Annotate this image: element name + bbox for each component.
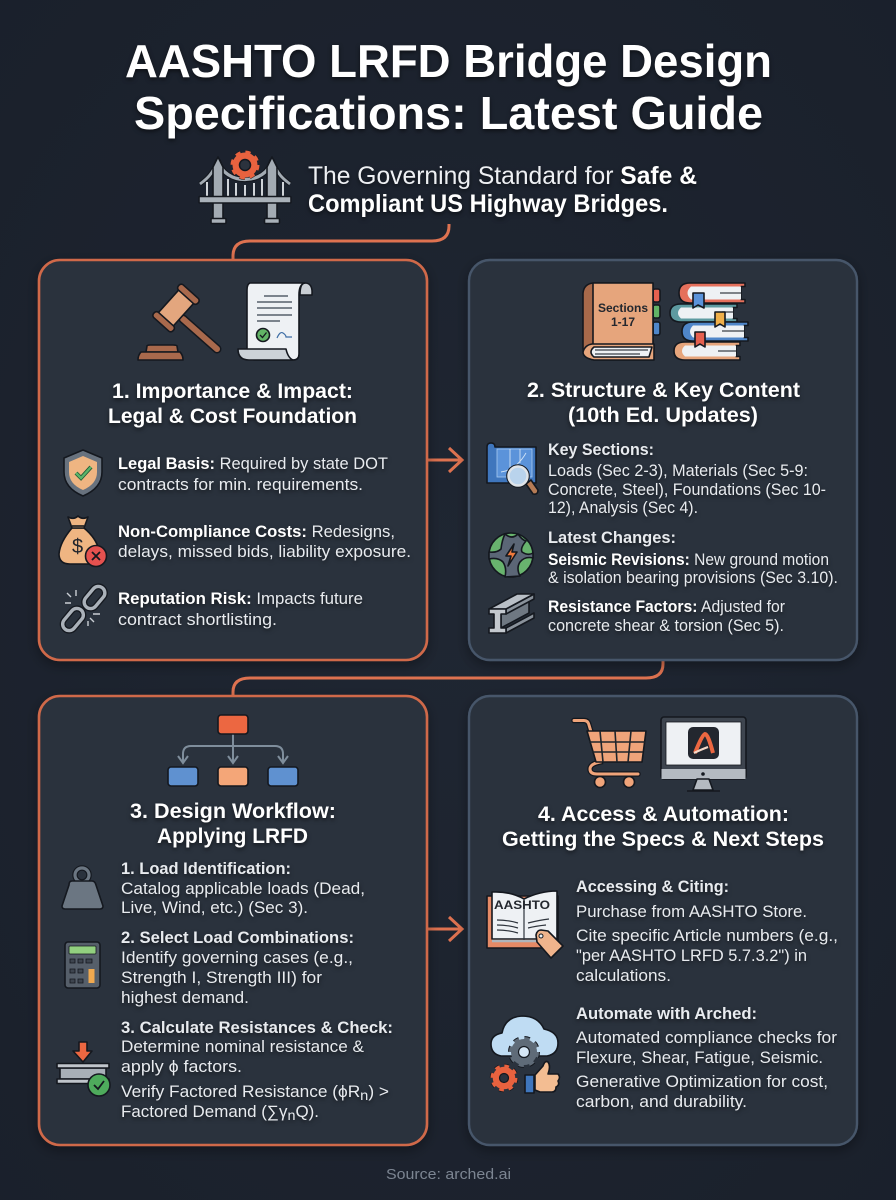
text: calculate resistances and check bbox=[121, 1019, 393, 1123]
icon: book stack bbox=[670, 283, 748, 360]
panel 4 card bbox=[469, 696, 857, 1145]
text: calculate resistances and check: n bbox=[287, 1107, 295, 1123]
text: key sections: 12), Analysis (Sec 4). bbox=[548, 499, 698, 517]
icon: blueprint magnifier bbox=[487, 443, 538, 494]
text: reputation risk: Reputation Risk: Impacts future bbox=[118, 590, 363, 608]
panel 2 card bbox=[469, 260, 857, 660]
text: accessing and citing: Accessing & Citing: bbox=[576, 878, 729, 896]
arrow: panel 3 to panel 4 bbox=[427, 917, 462, 941]
text: reputation risk bbox=[118, 590, 363, 629]
text: accessing and citing: Purchase from AASHTO Store. bbox=[576, 903, 807, 921]
heading: panel 4 bbox=[502, 802, 824, 851]
text: resistance factors: Resistance Factors: Adjusted for bbox=[548, 598, 785, 616]
text: calculate resistances and check: ) > bbox=[368, 1083, 389, 1101]
heading: panel 1: Legal & Cost Foundation bbox=[108, 404, 357, 428]
heading: panel 1: 1. Importance & Impact: bbox=[112, 379, 353, 403]
text: select load combinations: 2. Select Load Combinations: bbox=[121, 929, 354, 947]
text: reputation risk: contract shortlisting. bbox=[118, 611, 277, 629]
panel: importance and impact bbox=[39, 260, 427, 660]
text: load identification: Catalog applicable loads (Dead, bbox=[121, 880, 365, 898]
title bbox=[125, 35, 772, 139]
text: key sections bbox=[548, 441, 826, 517]
text: accessing and citing: Cite specific Article numbers (e.g., bbox=[576, 927, 838, 945]
icon: sections book bbox=[583, 283, 660, 360]
text: latest changes: & isolation bearing provisions (Sec 3.10). bbox=[548, 569, 838, 587]
icon: gavel bbox=[138, 283, 217, 360]
icon: seismic globe bbox=[489, 533, 533, 577]
icon: beam check bbox=[57, 1042, 110, 1096]
connector: title to panel 1 bbox=[233, 224, 449, 260]
text: select load combinations: Strength I, Strength III) for bbox=[121, 969, 323, 987]
title: AASHTO LRFD Bridge Design bbox=[125, 35, 772, 87]
text: automate with arched: Automate with Arched: bbox=[576, 1005, 757, 1023]
icon: bridge with gear bbox=[199, 152, 291, 224]
text: latest changes: Latest Changes: bbox=[548, 529, 676, 547]
text: select load combinations: highest demand. bbox=[121, 989, 249, 1007]
text: accessing and citing bbox=[576, 878, 838, 985]
text: select load combinations: Identify governing cases (e.g., bbox=[121, 949, 353, 967]
text: load identification: Live, Wind, etc.) (Sec 3). bbox=[121, 899, 308, 917]
text: load identification: 1. Load Identification: bbox=[121, 860, 291, 878]
icon: calculator bbox=[65, 942, 100, 988]
text: resistance factors bbox=[548, 598, 785, 635]
icon: workflow diagram bbox=[168, 715, 298, 786]
text: select load combinations bbox=[121, 929, 354, 1007]
text: automate with arched: carbon, and durability. bbox=[576, 1093, 747, 1111]
panel: access and automation bbox=[469, 696, 857, 1145]
text: legal basis: Legal Basis: Required by state DOT bbox=[118, 455, 388, 473]
icon: open AASHTO book with tag bbox=[487, 891, 563, 958]
text: load identification bbox=[121, 860, 365, 917]
text: automate with arched: Generative Optimization for cost, bbox=[576, 1073, 828, 1091]
text: accessing and citing: calculations. bbox=[576, 967, 671, 985]
icon: shopping cart bbox=[574, 720, 646, 788]
text: key sections: Concrete, Steel), Foundations (Sec 10- bbox=[548, 481, 826, 499]
text: calculate resistances and check: n bbox=[360, 1087, 368, 1103]
icon: sections book: Sections bbox=[598, 301, 648, 315]
panel: design workflow bbox=[39, 696, 427, 1145]
heading: panel 4: 4. Access & Automation: bbox=[538, 802, 789, 826]
panel 3 card bbox=[39, 696, 427, 1145]
icon: weight bbox=[62, 868, 103, 909]
text: calculate resistances and check: Verify Factored Resistance (ϕR bbox=[121, 1083, 349, 1101]
subtitle: Compliant US Highway Bridges. bbox=[308, 190, 668, 218]
subtitle: The Governing Standard for Safe & bbox=[308, 162, 697, 190]
text: non-compliance costs bbox=[118, 523, 411, 561]
text: accessing and citing: "per AASHTO LRFD 5.7.3.2") in bbox=[576, 947, 807, 965]
text: non-compliance costs: delays, missed bids, liability exposure. bbox=[118, 543, 411, 561]
heading: panel 1 bbox=[108, 379, 357, 428]
heading: panel 3: Applying LRFD bbox=[157, 824, 308, 848]
icon: cloud gears thumbs up bbox=[491, 1016, 560, 1093]
arrow: panel 1 to panel 2 bbox=[427, 448, 462, 472]
panel: structure and key content bbox=[469, 260, 857, 660]
text: automate with arched: Automated compliance checks for bbox=[576, 1029, 838, 1047]
text: resistance factors: concrete shear & torsion (Sec 5). bbox=[548, 617, 784, 635]
heading: panel 2: 2. Structure & Key Content bbox=[527, 378, 800, 402]
icon: shield check bbox=[64, 450, 102, 496]
icon: contract scroll bbox=[238, 283, 312, 360]
icon: money bag with x bbox=[59, 516, 106, 566]
text: legal basis bbox=[118, 455, 388, 494]
connector: panel 2 to panel 3 bbox=[233, 660, 663, 696]
text: calculate resistances and check: apply ϕ factors. bbox=[121, 1058, 242, 1076]
text: automate with arched: Flexure, Shear, Fatigue, Seismic. bbox=[576, 1049, 823, 1067]
icon: sections book: 1-17 bbox=[611, 315, 635, 329]
text: legal basis: contracts for min. requirements. bbox=[118, 476, 363, 494]
icon: open AASHTO book with tag: AASHTO bbox=[494, 900, 550, 912]
text: latest changes bbox=[548, 529, 838, 587]
text: latest changes: Seismic Revisions: New ground motion bbox=[548, 551, 829, 569]
text: non-compliance costs: Non-Compliance Costs: Redesigns, bbox=[118, 523, 395, 541]
heading: panel 3 bbox=[130, 799, 336, 848]
title: Specifications: Latest Guide bbox=[134, 87, 763, 139]
text: calculate resistances and check: Factored Demand (∑γ bbox=[121, 1103, 283, 1121]
icon: money bag with x: $ bbox=[72, 536, 83, 558]
panel 1 card bbox=[39, 260, 427, 660]
text: calculate resistances and check: Determine nominal resistance & bbox=[121, 1038, 364, 1056]
subtitle bbox=[308, 162, 697, 218]
heading: panel 4: Getting the Specs & Next Steps bbox=[502, 827, 824, 851]
heading: panel 3: 3. Design Workflow: bbox=[130, 799, 336, 823]
text: automate with arched bbox=[576, 1005, 838, 1111]
heading: panel 2 bbox=[527, 378, 800, 427]
icon: broken chain bbox=[60, 584, 108, 633]
source footer: Source: arched.ai bbox=[386, 1166, 511, 1183]
text: calculate resistances and check: 3. Calculate Resistances & Check: bbox=[121, 1019, 393, 1037]
text: key sections: Loads (Sec 2-3), Materials (Sec 5-9: bbox=[548, 462, 808, 480]
text: key sections: Key Sections: bbox=[548, 441, 654, 459]
icon: monitor with logo bbox=[661, 717, 746, 791]
heading: panel 2: (10th Ed. Updates) bbox=[568, 403, 758, 427]
text: calculate resistances and check: Q). bbox=[295, 1103, 319, 1121]
icon: steel i-beam bbox=[489, 594, 534, 633]
